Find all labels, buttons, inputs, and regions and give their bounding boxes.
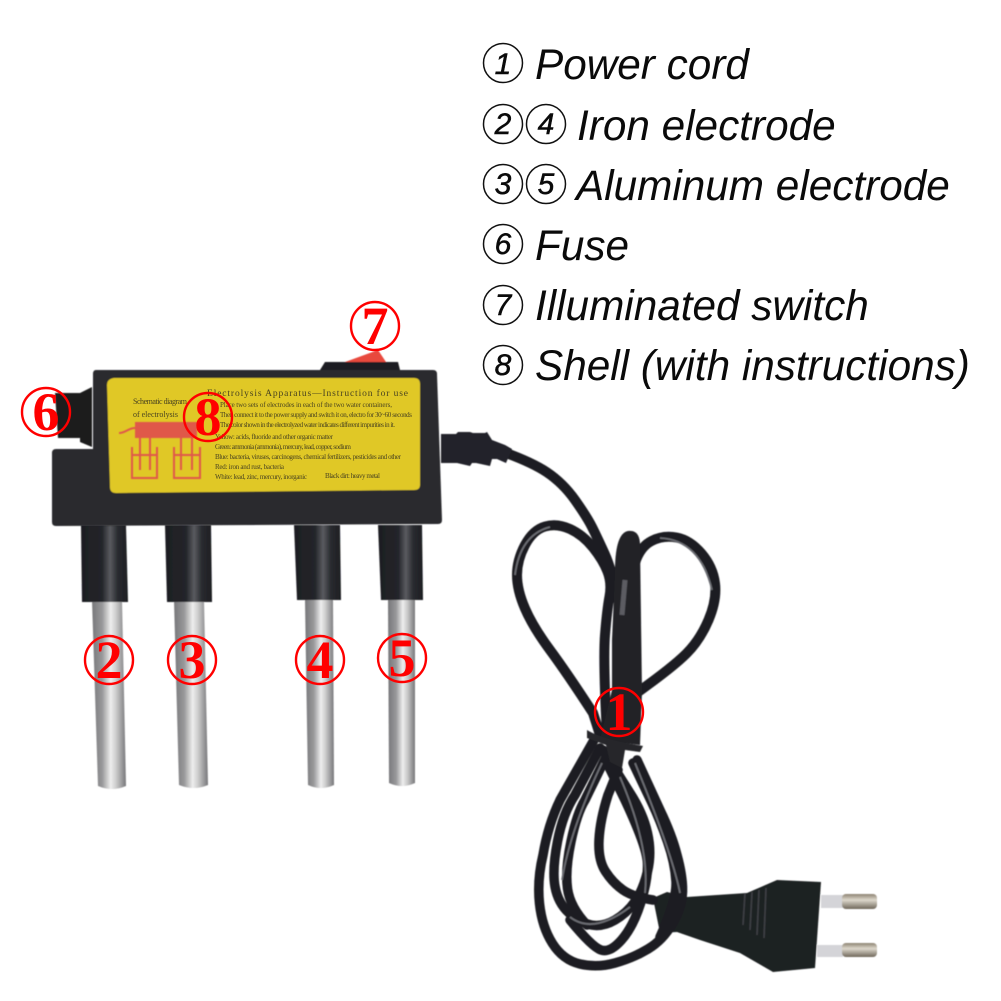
red marker 3 <box>168 630 216 690</box>
plug pin: top <box>821 894 877 909</box>
legend: fuse: 6 <box>495 228 512 261</box>
legend list <box>484 41 970 389</box>
instruction lines: Green: ammonia (ammonia), mercury, lead, copper, sodium <box>215 443 352 451</box>
power cord and plug <box>495 449 877 972</box>
plug grip ribs <box>743 888 766 938</box>
instruction lines: Black dirt: heavy metal <box>325 472 380 480</box>
fuse holder <box>55 387 92 447</box>
legend: iron electrode: Iron electrode <box>577 102 836 149</box>
schematic caption: Schematic diagram <box>133 397 188 406</box>
red marker 2 <box>85 630 133 690</box>
red marker 5: 5 <box>388 628 416 688</box>
cord: highlights <box>515 527 712 924</box>
cord: cable tie <box>587 730 643 768</box>
cord: upper loops and lead <box>495 449 715 735</box>
red marker 2: 2 <box>96 630 122 690</box>
instruction lines: Place two sets of electrodes in each of the two water containers, <box>220 401 392 409</box>
cord: lower bundle <box>539 740 683 966</box>
red marker 8: 8 <box>194 387 222 447</box>
instruction lines: The color shown in the electrolyzed water indicates different impurities in it. <box>220 421 395 429</box>
legend: aluminum electrode: 5 <box>538 168 555 201</box>
rod 2 <box>92 600 126 789</box>
schematic beaker right <box>174 438 200 478</box>
red marker 8 <box>184 387 232 447</box>
instruction lines: Red: iron and rust, bacteria <box>215 463 285 471</box>
red marker 4: 4 <box>306 630 334 690</box>
electrolysis schematic <box>119 422 200 478</box>
switch base <box>320 362 400 370</box>
legend: iron electrode: 4 <box>538 108 554 141</box>
sleeve 3 <box>165 525 212 602</box>
legend: illuminated switch: Illuminated switch <box>535 282 869 329</box>
rod 3 <box>174 600 208 788</box>
plug pin: bottom <box>817 943 877 957</box>
red marker 7 <box>351 296 399 356</box>
instruction lines: White: lead, zinc, mercury, inorganic <box>215 473 307 481</box>
schematic caption <box>133 397 188 419</box>
legend: power cord: Power cord <box>535 41 750 88</box>
cord: flat centre strand <box>600 531 642 745</box>
legend: aluminum electrode: Aluminum electrode <box>573 162 950 209</box>
red marker 1 <box>595 682 643 742</box>
instruction title: Electrolysis Apparatus—Instruction for use <box>207 388 408 399</box>
schematic wire <box>119 428 135 433</box>
red marker 4 <box>296 630 344 690</box>
yellow label <box>107 378 420 493</box>
rod 5 <box>388 600 415 786</box>
red marker 5 <box>378 628 426 688</box>
legend: illuminated switch: 7 <box>495 289 513 322</box>
legend: fuse <box>484 222 629 269</box>
legend: fuse: Fuse <box>535 222 629 269</box>
red marker 3: 3 <box>178 630 206 690</box>
strain relief <box>441 432 512 466</box>
label text <box>133 388 412 481</box>
housing <box>52 370 442 526</box>
plug body <box>653 880 821 972</box>
legend: power cord: 1 <box>495 48 511 81</box>
red marker 6 <box>22 382 70 442</box>
schematic bar <box>135 422 197 438</box>
instruction lines: Blue: bacteria, viruses, carcinogens, chemical fertilizers, pesticides and other <box>215 453 402 461</box>
red marker 6: 6 <box>32 382 60 442</box>
switch rocker <box>345 350 386 362</box>
sleeve 2 <box>81 525 128 602</box>
red marker 7: 7 <box>362 296 388 356</box>
legend: iron electrode: 2 <box>494 108 512 141</box>
instruction lines: Then connect it to the power supply and switch it on, electro for 30~60 seconds <box>220 411 412 419</box>
schematic beaker left <box>132 438 157 478</box>
red marker 1: 1 <box>606 682 632 742</box>
schematic caption: of electrolysis <box>133 410 178 419</box>
sleeve 5 <box>378 525 423 600</box>
instruction lines <box>215 401 412 481</box>
electrodes <box>81 525 423 789</box>
legend: shell with instructions: 8 <box>495 349 512 382</box>
sleeve 4 <box>294 525 341 600</box>
legend: aluminum electrode: 3 <box>495 168 512 201</box>
legend: shell with instructions: Shell (with instructions) <box>535 342 970 389</box>
rod 4 <box>305 600 334 788</box>
apparatus body <box>52 350 512 526</box>
instruction lines: Yellow: acids, fluoride and other organic matter <box>215 433 334 441</box>
